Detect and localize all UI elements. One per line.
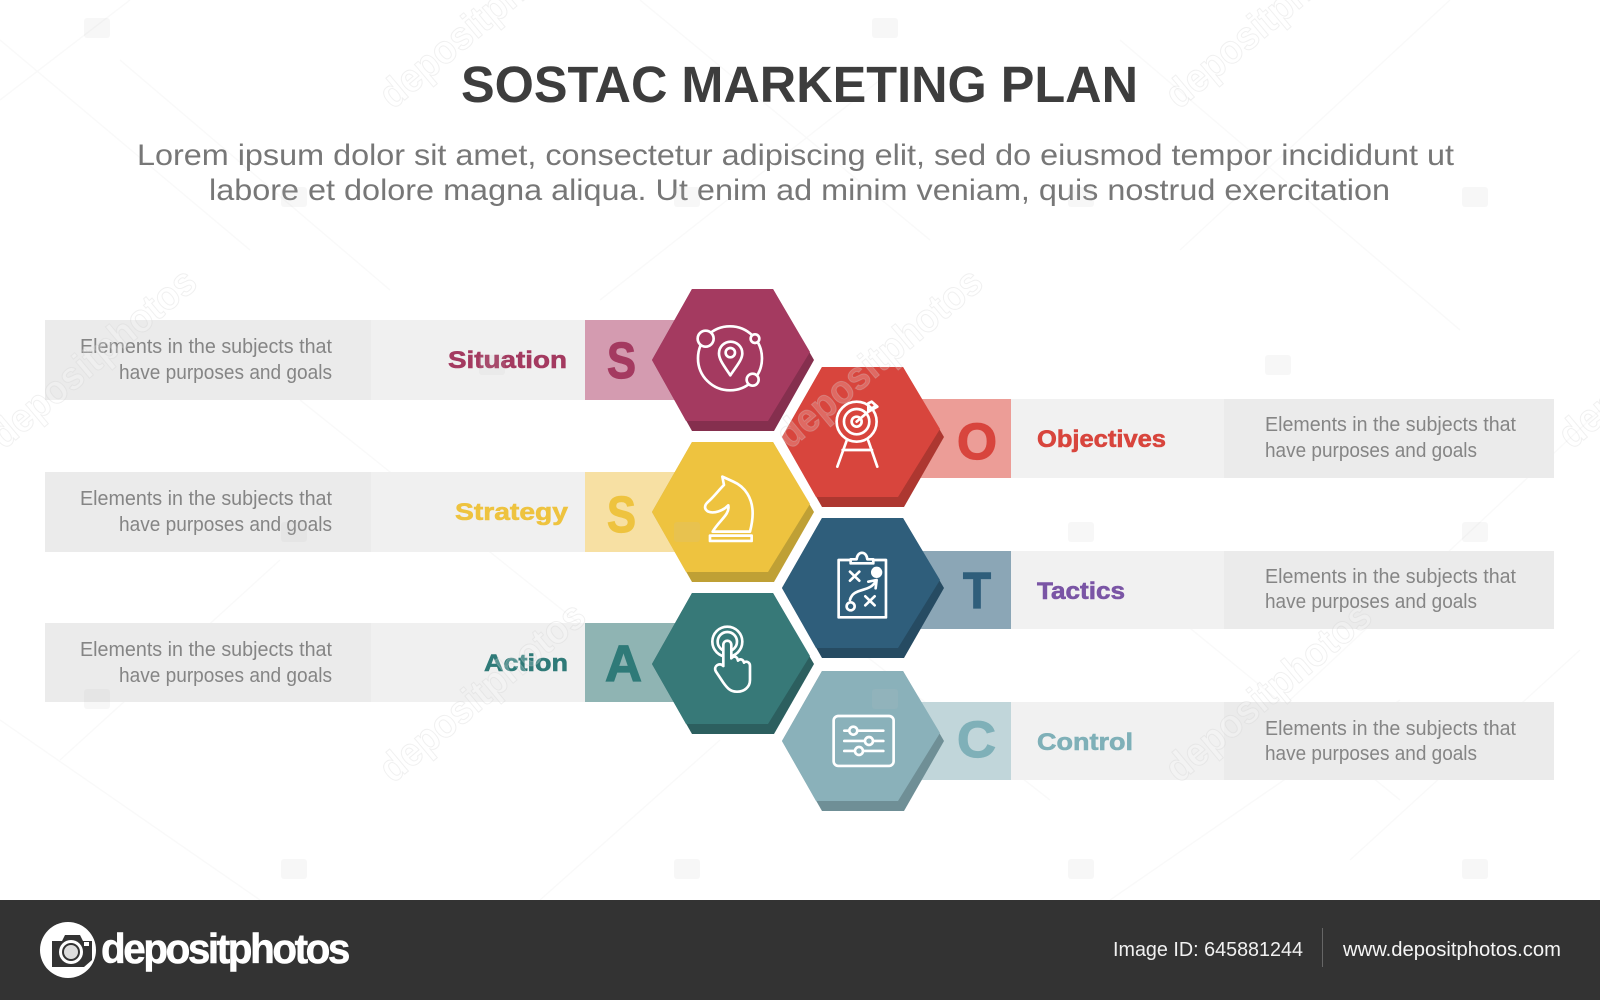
- panel: objectives: [782, 367, 1554, 507]
- subtitle text block: Lorem ipsum dolor sit amet, consectetur adipiscing elit, sed do eiusmod tempor incididunt ut: [137, 139, 1455, 172]
- label: strategy: Strategy: [455, 499, 569, 526]
- watermark: depositphotos text: [0, 0, 1600, 791]
- description: control: have purposes and goals: [1265, 743, 1477, 765]
- letter: O: O: [957, 413, 997, 470]
- description: objectives: have purposes and goals: [1265, 440, 1477, 462]
- hexagon: action: [652, 593, 814, 734]
- watermark: depositphotos text: depositphotos: [371, 593, 594, 791]
- icon: clipboard plan: [839, 553, 886, 617]
- subtitle text block: labore et dolore magna aliqua. Ut enim ad minim veniam, quis nostrud exercitation: [209, 174, 1390, 207]
- hexagon: strategy: [652, 442, 814, 582]
- label: tactics: Tactics: [1037, 578, 1125, 605]
- description: control: [1265, 718, 1516, 765]
- icon: sliders: [834, 716, 894, 766]
- letter: C: C: [957, 711, 996, 768]
- letter: A: A: [605, 635, 642, 692]
- subtitle text block: [137, 139, 1455, 207]
- description: tactics: have purposes and goals: [1265, 591, 1477, 613]
- icon: chess knight: [705, 477, 753, 541]
- letter: T: T: [963, 562, 991, 619]
- panel: situation: [45, 289, 814, 431]
- label: control: Control: [1037, 729, 1133, 756]
- letter: S: S: [607, 486, 636, 543]
- label: situation: Situation: [448, 347, 567, 374]
- description: strategy: [80, 488, 332, 536]
- letter: S: S: [607, 332, 636, 389]
- description: strategy: have purposes and goals: [119, 514, 332, 536]
- icon: camera logo: [40, 922, 96, 978]
- description: situation: [80, 336, 332, 384]
- title: SOSTAC MARKETING PLAN: [461, 56, 1138, 113]
- hexagon: control: [782, 671, 944, 811]
- description: action: [80, 639, 332, 687]
- icon: target: [837, 402, 877, 467]
- watermark: depositphotos text: depositphotos: [1157, 593, 1380, 791]
- icon: location orbit: [698, 326, 762, 390]
- icon: touch hand: [712, 627, 750, 692]
- label: objectives: Objectives: [1037, 426, 1166, 453]
- watermark: camera marks: [84, 18, 1488, 879]
- description: control: Elements in the subjects that: [1265, 718, 1516, 740]
- website url: www.depositphotos.com: [1342, 939, 1561, 961]
- label: action: Action: [484, 650, 568, 677]
- hexagon: tactics: [782, 518, 944, 658]
- description: situation: Elements in the subjects that: [80, 336, 332, 358]
- description: strategy: Elements in the subjects that: [80, 488, 332, 510]
- footer bar: [0, 900, 1600, 1000]
- description: tactics: Elements in the subjects that: [1265, 566, 1516, 588]
- description: objectives: [1265, 414, 1516, 462]
- panel: action: [45, 593, 814, 734]
- hexagon: situation: [652, 289, 814, 431]
- panel: control: [782, 671, 1554, 811]
- panel: strategy: [45, 442, 814, 582]
- description: objectives: Elements in the subjects that: [1265, 414, 1516, 436]
- panel: tactics: [782, 518, 1554, 658]
- description: action: Elements in the subjects that: [80, 639, 332, 661]
- description: situation: have purposes and goals: [119, 362, 332, 384]
- image id: Image ID: 645881244: [1113, 939, 1303, 961]
- description: action: have purposes and goals: [119, 665, 332, 687]
- logo wordmark: depositphotos: [101, 925, 349, 972]
- watermark: depositphotos text: depositphotos: [768, 259, 991, 457]
- hexagon: objectives: [782, 367, 944, 507]
- description: tactics: [1265, 566, 1516, 613]
